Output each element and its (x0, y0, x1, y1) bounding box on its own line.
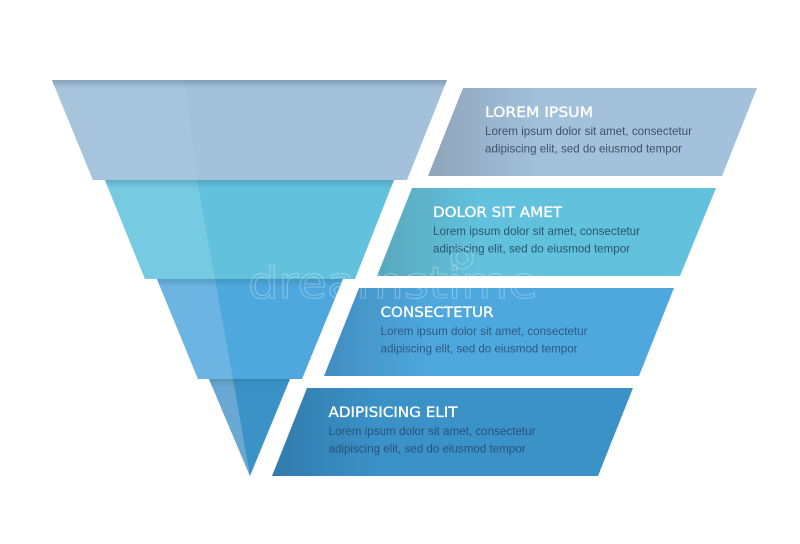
body text: consectetur: Lorem ipsum dolor sit amet, consectetur (380, 324, 588, 338)
heading: dolor sit amet: DOLOR SIT AMET (433, 205, 562, 221)
body text: dolor sit amet: Lorem ipsum dolor sit amet, consectetur (433, 224, 640, 238)
body text: dolor sit amet: adipiscing elit, sed do eiusmod tempor (433, 242, 630, 256)
body text: dolor sit amet (433, 224, 640, 256)
body text: adipisicing elit: Lorem ipsum dolor sit amet, consectetur (328, 424, 536, 438)
funnel tier 2 (105, 180, 394, 279)
body text: lorem ipsum: adipiscing elit, sed do eiusmod tempor (485, 142, 682, 156)
funnel tier 1 (52, 80, 447, 180)
body text: consectetur (380, 324, 588, 356)
funnel tier 3 (157, 279, 343, 379)
body text: adipisicing elit (328, 424, 536, 456)
heading: consectetur: CONSECTETUR (380, 305, 494, 321)
body text: lorem ipsum (485, 124, 692, 156)
body text: consectetur: adipiscing elit, sed do eiusmod tempor (380, 342, 578, 356)
panel: consectetur (324, 288, 674, 376)
heading: adipisicing elit: ADIPISICING ELIT (328, 405, 458, 421)
panel: dolor sit amet (377, 188, 716, 276)
body text: adipisicing elit: adipiscing elit, sed do eiusmod tempor (328, 442, 526, 456)
panel: lorem ipsum (428, 88, 757, 176)
heading: lorem ipsum: LOREM IPSUM (485, 105, 593, 121)
watermark: dreamstime (248, 258, 538, 309)
body text: lorem ipsum: Lorem ipsum dolor sit amet, consectetur (485, 124, 692, 138)
funnel chart (52, 80, 447, 476)
panel: adipisicing elit (272, 388, 633, 476)
funnel tier 4 (209, 379, 290, 476)
